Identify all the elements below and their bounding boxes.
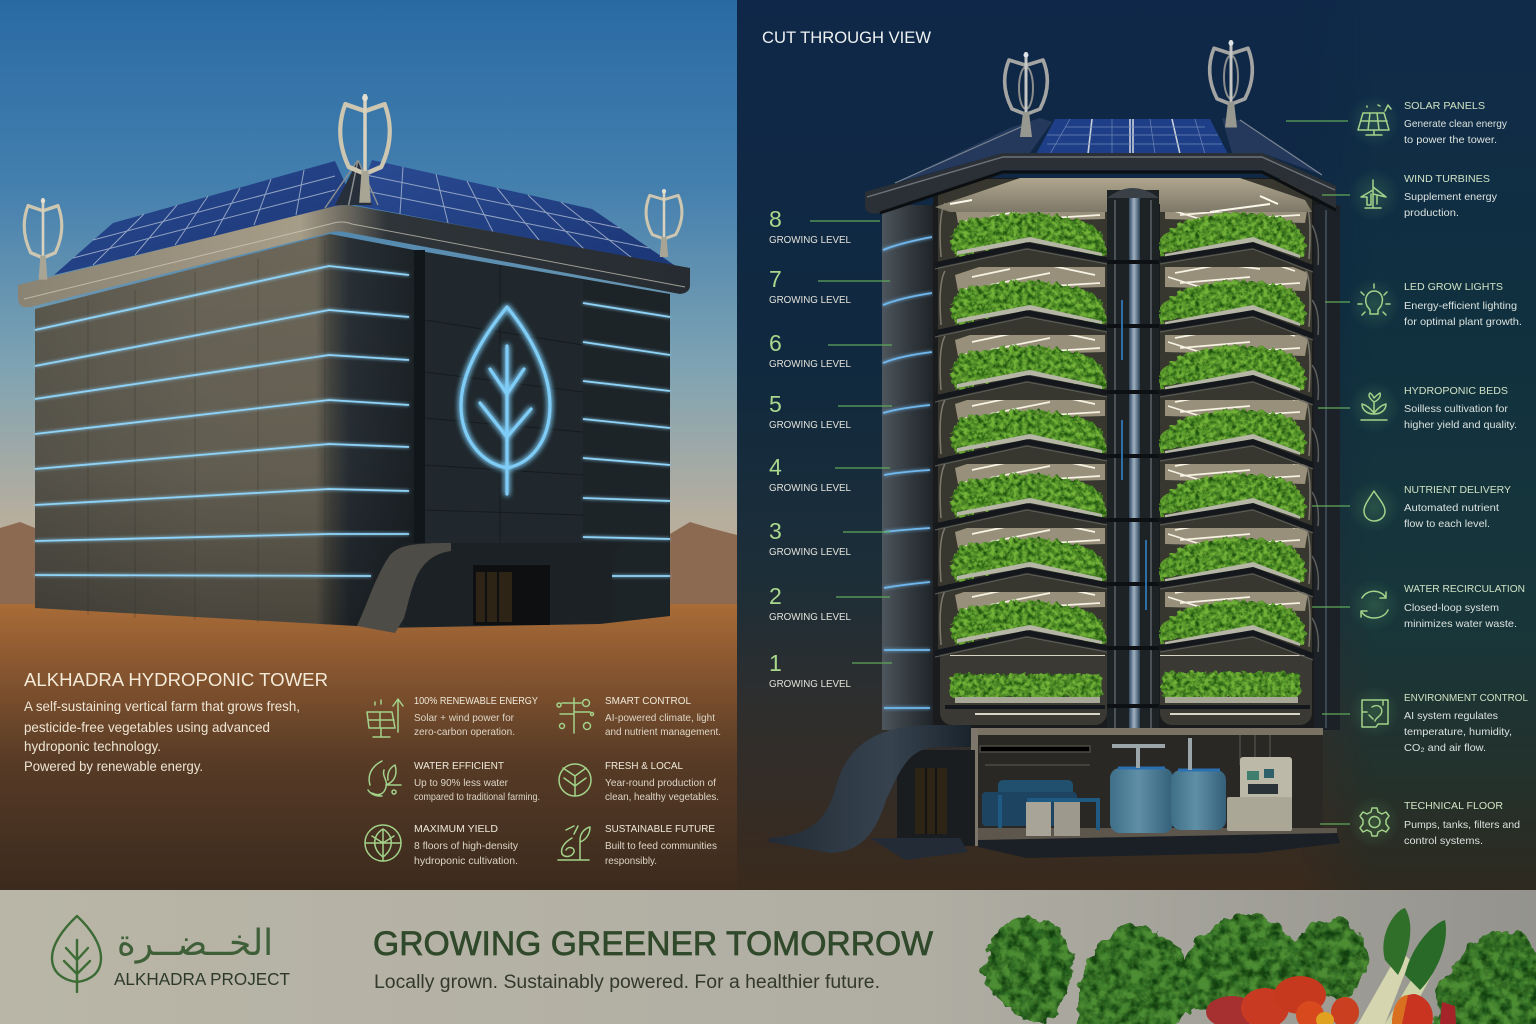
callout: solar panels xyxy=(1286,95,1508,147)
feature: renewable energy: 100% RENEWABLE ENERGY xyxy=(414,695,538,707)
feature: water efficient: WATER EFFICIENT xyxy=(414,760,505,772)
callout: solar panels: to power the tower. xyxy=(1404,134,1497,146)
top ceiling xyxy=(935,178,1312,212)
level 4 label xyxy=(769,454,890,494)
level 5 label xyxy=(769,391,892,431)
callout: LED grow lights: Energy-efficient lighting xyxy=(1404,300,1517,312)
level 4 label: 4 xyxy=(769,454,782,480)
feature: maximum yield: 8 floors of high-density xyxy=(414,841,519,852)
tower outer wall xyxy=(882,205,934,730)
feature: water efficient: compared to traditional farming. xyxy=(414,792,540,803)
brand name: ALKHADRA PROJECT xyxy=(114,969,290,989)
center panel xyxy=(425,252,583,545)
eave xyxy=(18,205,690,307)
callout: water recirculation: WATER RECIRCULATION xyxy=(1404,583,1525,595)
wind turbines on cutaway roof xyxy=(1005,40,1252,137)
right wall frame xyxy=(1312,205,1340,730)
callout: nutrient delivery xyxy=(1312,481,1511,533)
roof solar panels xyxy=(54,160,677,275)
level 1 label: 1 xyxy=(769,650,782,676)
building: exterior tower xyxy=(18,160,690,633)
entrance xyxy=(357,543,623,633)
description text: A self-sustaining vertical farm that grows fresh, xyxy=(24,698,300,714)
technical floor xyxy=(971,728,1340,858)
level labels xyxy=(769,206,892,690)
logo leaf xyxy=(52,916,101,992)
callout: environment control: temperature, humidity, xyxy=(1404,726,1512,738)
callout: nutrient delivery: flow to each level. xyxy=(1404,518,1490,530)
level 7 label: 7 xyxy=(769,266,782,292)
arabic brand name: الخــضــرة xyxy=(117,923,273,964)
description text: Powered by renewable energy. xyxy=(24,758,203,774)
interior background xyxy=(933,178,1321,730)
growing level 6 xyxy=(935,312,1313,405)
level 6 label xyxy=(769,330,892,370)
callout: hydroponic beds: HYDROPONIC BEDS xyxy=(1404,385,1508,397)
wind turbines on exterior roof xyxy=(24,94,682,280)
level 8 label: GROWING LEVEL xyxy=(769,234,851,246)
callout: water recirculation xyxy=(1312,579,1525,631)
callout: LED grow lights: for optimal plant growth. xyxy=(1404,316,1522,328)
growing level 7 xyxy=(935,247,1313,340)
bok choy xyxy=(1358,908,1446,1024)
cutaway tower xyxy=(769,118,1340,860)
feature: sustainable future: responsibly. xyxy=(605,856,657,867)
callout: hydroponic beds xyxy=(1318,381,1517,433)
level 2 label: 2 xyxy=(769,583,782,609)
level 2 label xyxy=(769,583,890,623)
callout: nutrient delivery: Automated nutrient xyxy=(1404,502,1499,514)
level 7 label: GROWING LEVEL xyxy=(769,294,851,306)
growing level 4 xyxy=(935,440,1313,533)
right column background xyxy=(1334,596,1536,890)
feature: maximum yield: MAXIMUM YIELD xyxy=(414,823,498,835)
feature: renewable energy: zero-carbon operation. xyxy=(414,727,515,738)
title: ALKHADRA HYDROPONIC TOWER xyxy=(24,670,328,690)
callout: nutrient delivery: NUTRIENT DELIVERY xyxy=(1404,484,1511,496)
panel background xyxy=(737,0,1536,890)
feature: water efficient xyxy=(368,760,540,803)
level 1 label xyxy=(769,650,892,690)
feature: maximum yield: hydroponic cultivation. xyxy=(414,856,518,867)
growing level 8 xyxy=(935,179,1313,272)
entrance canopy xyxy=(769,725,975,860)
slogan: GROWING GREENER TOMORROW xyxy=(373,925,933,963)
footer background xyxy=(0,890,1536,1024)
feature: renewable energy: Solar + wind power for xyxy=(414,713,515,724)
level 6 label: GROWING LEVEL xyxy=(769,358,851,370)
level 3 label: GROWING LEVEL xyxy=(769,546,851,558)
level 4 label: GROWING LEVEL xyxy=(769,482,851,494)
callout: wind turbines xyxy=(1322,169,1498,221)
pumps and pipes xyxy=(982,780,1098,836)
callout: hydroponic beds: higher yield and quality. xyxy=(1404,419,1517,431)
lettuce heads xyxy=(983,915,1536,1024)
callout: wind turbines: WIND TURBINES xyxy=(1404,173,1490,185)
panel: footer band xyxy=(0,890,1536,1024)
glowing leaf logo xyxy=(461,307,550,494)
left wall xyxy=(35,234,414,626)
level 2 label: GROWING LEVEL xyxy=(769,611,851,623)
feature: sustainable future: Built to feed communities xyxy=(605,841,717,852)
description text: pesticide-free vegetables using advanced xyxy=(24,719,270,735)
callout: wind turbines: production. xyxy=(1404,207,1459,219)
callout: technical floor xyxy=(1320,796,1520,848)
feature: fresh and local xyxy=(559,760,719,803)
feature: fresh and local: FRESH & LOCAL xyxy=(605,760,683,772)
callout: solar panels: SOLAR PANELS xyxy=(1404,100,1485,112)
level 1 label: GROWING LEVEL xyxy=(769,678,851,690)
sub slogan: Locally grown. Sustainably powered. For a healthier future. xyxy=(374,972,880,993)
feature: fresh and local: clean, healthy vegetables. xyxy=(605,792,719,803)
LED facade stripes xyxy=(35,266,670,576)
feature: renewable energy xyxy=(367,695,538,738)
level 8 label: 8 xyxy=(769,206,782,232)
roof and eave xyxy=(865,118,1336,214)
callout: water recirculation: minimizes water waste. xyxy=(1404,618,1517,630)
level 8 label xyxy=(769,206,880,246)
callout: solar panels: Generate clean energy xyxy=(1404,118,1508,130)
callout: LED grow lights: LED GROW LIGHTS xyxy=(1404,281,1503,293)
desert ground xyxy=(0,604,737,890)
feature: smart control: AI-powered climate, light xyxy=(605,713,715,724)
growing level 5 xyxy=(935,376,1313,469)
water tanks xyxy=(1110,738,1226,833)
level 5 label: GROWING LEVEL xyxy=(769,419,851,431)
level 7 label xyxy=(769,266,890,306)
vegetables xyxy=(983,908,1536,1024)
wall LED stripes xyxy=(883,237,932,708)
panel: cut through view xyxy=(737,0,1536,890)
level 3 label: 3 xyxy=(769,518,782,544)
feature: water efficient: Up to 90% less water xyxy=(414,778,509,789)
growing level 1 xyxy=(940,645,1312,725)
feature: sustainable future xyxy=(558,823,717,867)
feature: maximum yield xyxy=(365,823,519,867)
central service column xyxy=(1107,188,1159,728)
level 3 label xyxy=(769,518,890,558)
callout: wind turbines: Supplement energy xyxy=(1404,191,1498,203)
callout: environment control xyxy=(1322,686,1528,754)
callout: LED grow lights xyxy=(1325,278,1522,330)
callout: environment control: ENVIRONMENT CONTROL xyxy=(1404,692,1528,704)
feature: smart control xyxy=(557,695,721,738)
description text xyxy=(24,698,300,774)
level 6 label: 6 xyxy=(769,330,782,356)
callout: water recirculation: Closed-loop system xyxy=(1404,602,1499,614)
feature: smart control: and nutrient management. xyxy=(605,727,721,738)
right wall xyxy=(380,250,670,628)
callout: environment control: CO₂ and air flow. xyxy=(1404,742,1486,754)
growing level 3 xyxy=(935,504,1313,597)
control cabinet xyxy=(1227,757,1292,831)
growing level 2 xyxy=(935,567,1313,660)
feature: sustainable future: SUSTAINABLE FUTURE xyxy=(605,823,715,835)
callout: environment control: AI system regulates xyxy=(1404,710,1498,722)
level 5 label: 5 xyxy=(769,391,782,417)
sky xyxy=(0,0,737,610)
panel: exterior view xyxy=(0,0,737,890)
description text: hydroponic technology. xyxy=(24,738,161,754)
callout: technical floor: Pumps, tanks, filters and xyxy=(1404,819,1520,831)
desert mountains xyxy=(0,522,737,610)
feature: fresh and local: Year-round production of xyxy=(605,778,716,789)
callout: technical floor: control systems. xyxy=(1404,835,1483,847)
heading: CUT THROUGH VIEW xyxy=(762,28,931,47)
callout: technical floor: TECHNICAL FLOOR xyxy=(1404,800,1503,812)
feature: smart control: SMART CONTROL xyxy=(605,695,691,707)
callout: hydroponic beds: Soilless cultivation for xyxy=(1404,403,1509,415)
red peppers and tomatoes xyxy=(1206,976,1456,1024)
